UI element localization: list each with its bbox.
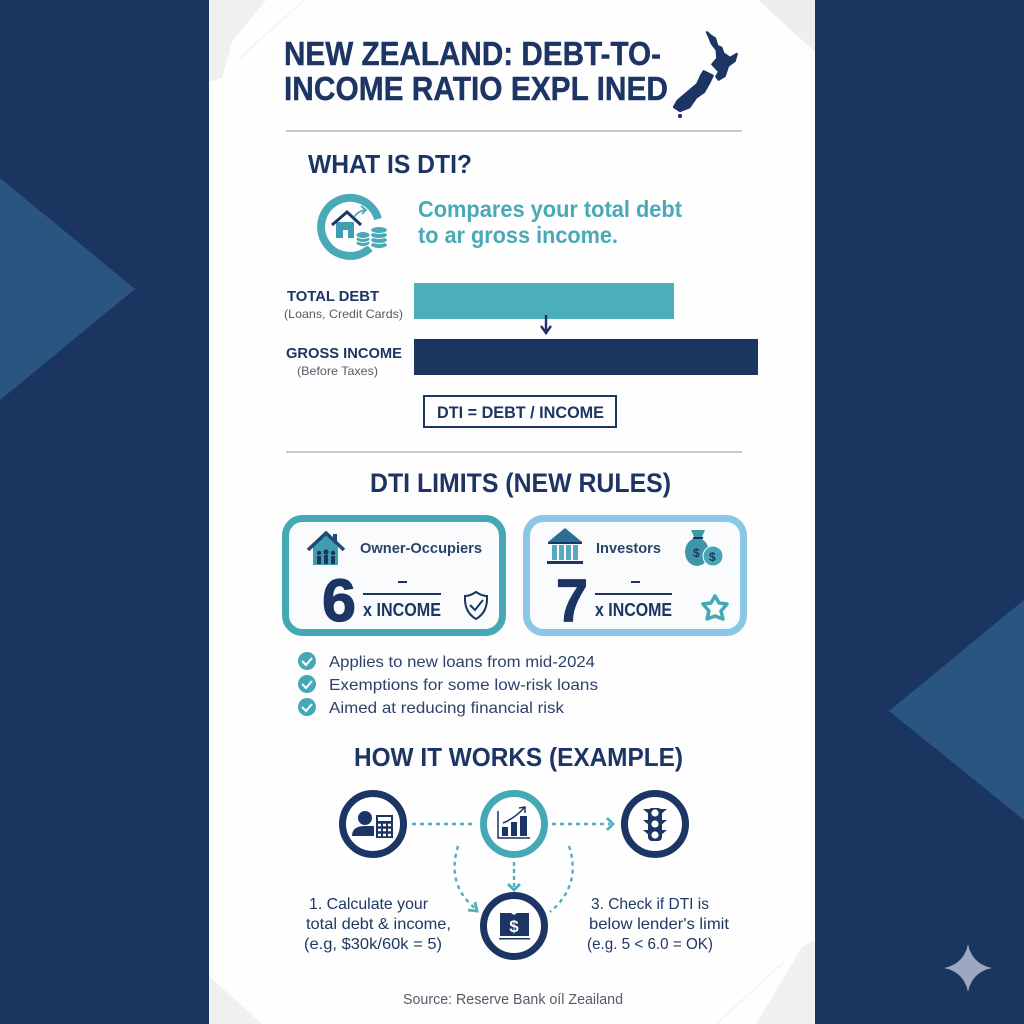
icon: money bags: $ xyxy=(693,546,700,560)
step icon: chart xyxy=(484,794,544,854)
heading: DTI limits: DTI LIMITS (NEW RULES) xyxy=(370,468,671,498)
step icon: dollar book xyxy=(484,896,544,956)
definition text: to ar gross income. xyxy=(418,222,618,248)
bar: total debt xyxy=(414,283,674,319)
number: 6: 6 xyxy=(322,567,356,634)
panel: main xyxy=(209,0,815,1024)
icon: shield xyxy=(465,592,487,619)
bullet: applies: Applies to new loans from mid-2024 xyxy=(329,654,595,671)
heading: how it works: HOW IT WORKS (EXAMPLE) xyxy=(354,742,683,772)
label: gross income xyxy=(286,345,402,378)
label: owner-occupiers: Owner-Occupiers xyxy=(360,540,482,557)
label: gross income: GROSS INCOME xyxy=(286,345,402,362)
number: 7: 7 xyxy=(556,567,588,634)
step text: check xyxy=(587,896,730,953)
step icon: traffic light xyxy=(624,794,686,854)
step text: calculate xyxy=(304,896,451,953)
background triangle right xyxy=(889,600,1024,820)
panel: owner-occupiers xyxy=(286,518,502,634)
step icon: dollar book: $ xyxy=(509,917,519,936)
label: total debt: (Loans, Credit Cards) xyxy=(284,307,403,321)
icon: bank xyxy=(547,528,583,564)
definition text: Compares your total debt xyxy=(418,196,682,222)
fraction: x income xyxy=(363,581,441,620)
icon: money bags: $ xyxy=(709,550,716,564)
bullet: exemptions: Exemptions for some low-risk loans xyxy=(329,677,598,694)
title xyxy=(284,35,668,107)
flow arrows xyxy=(412,818,613,912)
fraction: x income: x INCOME xyxy=(363,600,441,620)
title: NEW ZEALAND: DEBT-TO- xyxy=(284,35,661,72)
icon: sparkle xyxy=(944,944,992,992)
label: gross income: (Before Taxes) xyxy=(297,364,378,378)
label: investors: Investors xyxy=(596,540,661,557)
step text: check: below lender's limit xyxy=(589,916,730,933)
bar: gross income xyxy=(414,339,758,375)
background triangle left xyxy=(0,178,135,400)
title: INCOME RATIO EXPL INED xyxy=(284,70,668,107)
step icon: person and calculator xyxy=(342,794,404,854)
arrow: debt to income xyxy=(541,315,551,333)
list: rule notes xyxy=(298,652,598,717)
label: total debt xyxy=(284,288,403,321)
formula box xyxy=(424,396,616,427)
label: total debt: TOTAL DEBT xyxy=(287,288,379,305)
step text: calculate: 1. Calculate your xyxy=(309,896,429,913)
icon: house and coins xyxy=(321,198,388,256)
step text: calculate: (e.g, $30k/60k = 5) xyxy=(304,936,442,953)
definition text xyxy=(418,196,682,248)
source: Source: Reserve Bank oíl Zeailand xyxy=(403,991,623,1008)
step text: check: 3. Check if DTI is xyxy=(591,896,709,913)
formula box: DTI = DEBT / INCOME xyxy=(437,403,604,422)
icon: New Zealand map xyxy=(674,32,737,117)
icon: family house xyxy=(308,533,344,565)
heading: what is DTI: WHAT IS DTI? xyxy=(308,149,472,179)
divider xyxy=(286,451,742,453)
step text: check: (e.g. 5 < 6.0 = OK) xyxy=(587,936,713,953)
bullet: aim: Aimed at reducing financial risk xyxy=(329,700,565,717)
divider xyxy=(286,130,742,132)
icon: money bags xyxy=(685,530,723,566)
fraction: x income: x INCOME xyxy=(595,600,672,620)
icon: star xyxy=(703,596,727,619)
step text: calculate: total debt & income, xyxy=(306,916,451,933)
fraction: x income xyxy=(595,581,672,620)
panel: investors xyxy=(526,518,744,634)
